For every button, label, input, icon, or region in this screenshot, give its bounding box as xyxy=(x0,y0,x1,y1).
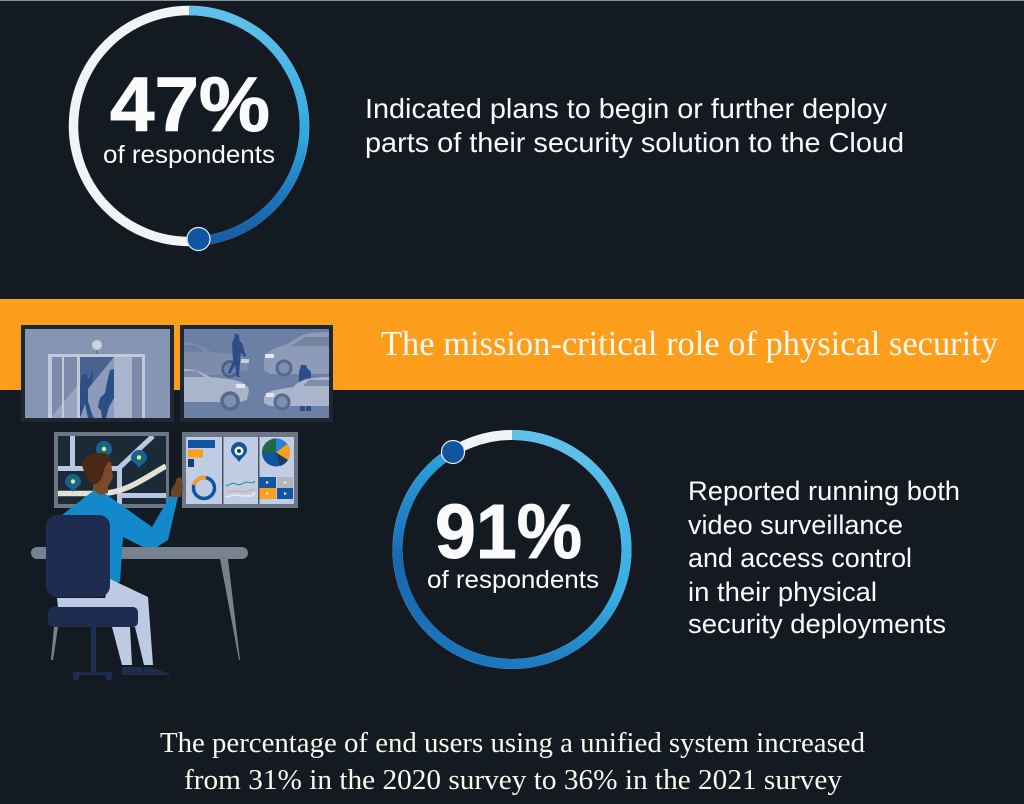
closing statement: The percentage of end users using a unified system increased xyxy=(160,727,865,759)
banner heading: The mission-critical role of physical security xyxy=(381,324,998,363)
text block: cloud deployment: parts of their security solution to the Cloud xyxy=(365,127,904,158)
monitor: map xyxy=(54,432,169,508)
caption: of respondents (91%): of respondents xyxy=(427,566,599,594)
closing statement: from 31% in the 2020 survey to 36% in the 2021 survey xyxy=(184,764,843,796)
stat value: 47%: 47% xyxy=(110,62,270,148)
text block: video and access control: and access control xyxy=(688,543,912,573)
text block: video and access control: video surveillance xyxy=(688,510,903,540)
office chair xyxy=(46,515,138,680)
monitor: analytics dashboard xyxy=(182,432,298,508)
stat ring: 91% xyxy=(398,435,626,664)
pie chart xyxy=(262,438,290,466)
desk xyxy=(31,547,248,660)
text block: video and access control: Reported running both xyxy=(688,476,960,506)
closing statement xyxy=(160,727,865,796)
operator figure xyxy=(57,453,183,675)
caption: of respondents (47%): of respondents xyxy=(103,141,275,169)
orange banner xyxy=(0,299,1024,390)
stat value: 91%: 91% xyxy=(435,489,582,575)
monitor: entrance camera xyxy=(21,325,174,422)
text block: video and access control: security deployments xyxy=(688,609,946,639)
donut chart xyxy=(194,478,214,498)
location pin xyxy=(231,442,247,462)
text block: video and access control xyxy=(688,476,960,639)
text block: video and access control: in their physical xyxy=(688,577,877,607)
line chart xyxy=(226,481,255,497)
stat ring: 47% xyxy=(74,10,304,250)
text block: cloud deployment: Indicated plans to begin or further deploy xyxy=(365,93,887,124)
video tiles xyxy=(260,477,293,499)
monitor: parking camera xyxy=(180,325,333,422)
bar chart xyxy=(188,440,215,467)
text block: cloud deployment xyxy=(365,93,904,158)
illustration: security operator at monitors xyxy=(21,325,333,680)
